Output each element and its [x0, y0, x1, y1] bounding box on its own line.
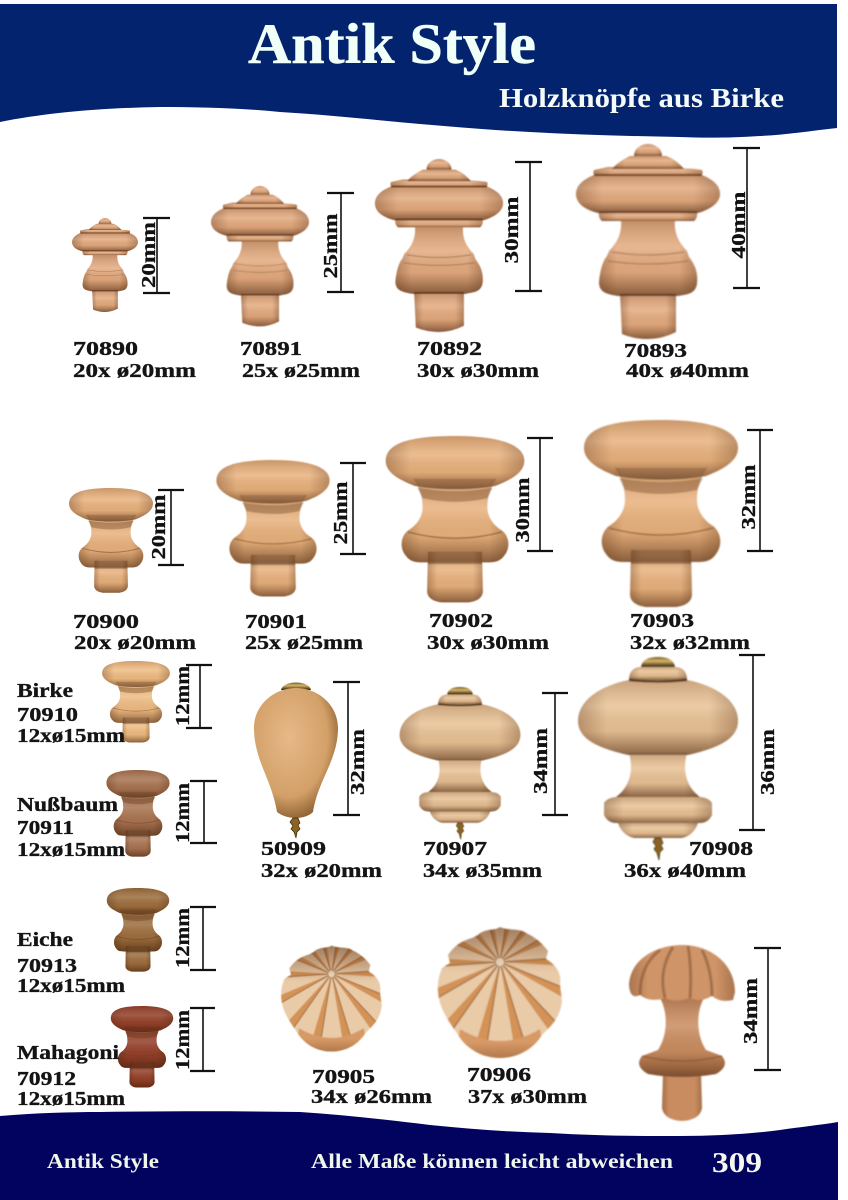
label 70891: 25x ø25mm [242, 360, 360, 382]
product 50909 [254, 682, 382, 882]
dimension 20mm: 20mm [138, 222, 160, 288]
dimension 32mm [333, 682, 369, 815]
label Birke [17, 680, 125, 747]
knob 70892 [375, 159, 503, 332]
label 70908: 36x ø40mm [624, 860, 746, 882]
label 70906: 37x ø30mm [468, 1086, 587, 1108]
dimension 36mm [739, 655, 779, 830]
dimension 40mm: 40mm [728, 191, 750, 258]
dimension 34mm [530, 693, 568, 815]
dimension 12mm [172, 907, 216, 970]
title: Antik Style [248, 13, 536, 76]
product 70905 [238, 882, 432, 1108]
fluted mushroom knob [629, 945, 735, 1121]
label Eiche [17, 929, 125, 997]
product 70903 [584, 420, 773, 654]
label 50909: 50909 [261, 838, 326, 860]
label 70891 [240, 338, 360, 382]
label 70892: 30x ø30mm [417, 360, 539, 382]
label Nussbaum: 70911 [17, 817, 74, 839]
dimension 20mm [148, 490, 184, 565]
dimension 32mm: 32mm [347, 729, 369, 795]
knob 70907 [400, 687, 520, 839]
dimension 30mm [501, 162, 542, 291]
label 70907 [423, 838, 542, 882]
label Mahagoni: Mahagoni [17, 1042, 120, 1064]
label 50909 [261, 838, 382, 882]
footer brand: Antik Style [47, 1149, 159, 1173]
dimension 12mm [172, 781, 217, 843]
dimension 30mm [512, 438, 553, 551]
label 70905 [311, 1066, 432, 1108]
dimension 20mm: 20mm [148, 494, 170, 560]
dimension 34mm [740, 948, 781, 1070]
label Mahagoni: 12xø15mm [17, 1088, 125, 1110]
product 70912 Mahagoni [17, 1006, 215, 1110]
footer note: Alle Maße können leicht abweichen [311, 1149, 673, 1173]
label Birke: Birke [17, 680, 73, 702]
fluted knob 70905 [238, 882, 425, 1066]
label 70906 [467, 1064, 587, 1108]
product mushroom knob [629, 945, 781, 1121]
dimension 32mm: 32mm [738, 464, 760, 530]
label 70902: 70902 [429, 610, 493, 632]
dimension 25mm [330, 463, 366, 554]
product 70891 [211, 186, 360, 382]
product 70911 Nussbaum [17, 770, 217, 861]
dimension 12mm [172, 665, 212, 728]
dimension 12mm: 12mm [172, 1010, 194, 1070]
dimension 30mm: 30mm [512, 477, 534, 542]
product 70913 Eiche [17, 888, 216, 997]
label 70890 [73, 338, 196, 382]
product 70907 [400, 687, 568, 882]
label Nussbaum [17, 794, 125, 861]
product 70892 [375, 159, 542, 382]
knob Nussbaum [106, 770, 170, 857]
knob 70902 [386, 436, 524, 602]
knob 70891 [211, 186, 309, 326]
dimension 25mm: 25mm [320, 213, 342, 278]
knob Birke [102, 661, 170, 743]
product 70900 [69, 488, 196, 654]
label Nussbaum: Nußbaum [17, 794, 118, 816]
product 70893 [576, 144, 760, 382]
label Eiche: 12xø15mm [17, 975, 125, 997]
product 70890 [72, 218, 196, 382]
label 70905: 70905 [312, 1066, 375, 1088]
dimension 40mm [728, 148, 760, 288]
dimension 12mm: 12mm [172, 908, 194, 968]
product 70901 [216, 460, 366, 654]
knob 70890 [72, 218, 138, 312]
product 70906 [385, 848, 615, 1108]
product 70908 [578, 655, 779, 882]
label Eiche: Eiche [17, 929, 73, 951]
dimension 25mm [320, 193, 354, 292]
dimension 20mm [138, 218, 170, 293]
label 70893: 70893 [624, 340, 687, 362]
dimension 34mm: 34mm [740, 978, 762, 1044]
knob Mahagoni [111, 1006, 173, 1088]
label 70893: 40x ø40mm [626, 360, 749, 382]
label Nussbaum: 12xø15mm [17, 839, 125, 861]
label 70890: 20x ø20mm [73, 360, 196, 382]
label 70901: 25x ø25mm [245, 632, 363, 654]
label 70900: 70900 [73, 611, 139, 633]
label Birke: 12xø15mm [17, 725, 125, 747]
label Mahagoni [17, 1042, 125, 1110]
label 70891: 70891 [240, 338, 302, 360]
subtitle: Holzknöpfe aus Birke [499, 83, 784, 113]
label 70905: 34x ø26mm [311, 1086, 432, 1108]
fluted knob 70906 [385, 848, 615, 1076]
header banner [0, 4, 837, 138]
dimension 30mm: 30mm [501, 196, 523, 264]
label Mahagoni: 70912 [17, 1068, 76, 1090]
label 70892 [417, 338, 539, 382]
product 70902 [386, 436, 553, 654]
knob 50909 pear [254, 682, 338, 838]
knob 70901 [216, 460, 330, 597]
label 70902 [427, 610, 549, 654]
label 70907: 34x ø35mm [423, 860, 542, 882]
knob 70893 [576, 144, 720, 339]
label Eiche: 70913 [17, 955, 77, 977]
knob 70908 [578, 657, 738, 860]
knob Eiche [107, 888, 169, 972]
product 70910 Birke [17, 661, 212, 747]
label 70893 [624, 340, 749, 382]
footer banner [0, 1111, 838, 1200]
dimension 34mm: 34mm [530, 728, 552, 794]
knob 70900 [69, 488, 153, 593]
label Birke: 70910 [17, 704, 78, 726]
dimension 32mm [738, 430, 773, 551]
dimension 12mm: 12mm [172, 666, 194, 726]
label 70900: 20x ø20mm [74, 632, 196, 654]
label 70908: 70908 [689, 838, 753, 860]
label 70903: 70903 [630, 610, 694, 632]
label 70890: 70890 [73, 338, 138, 360]
label 70903: 32x ø32mm [630, 632, 750, 654]
label 50909: 32x ø20mm [261, 860, 382, 882]
page number: 309 [712, 1148, 762, 1179]
dimension 25mm: 25mm [330, 481, 352, 544]
label 70900 [73, 611, 196, 654]
label 70903 [630, 610, 750, 654]
label 70901 [245, 611, 363, 654]
label 70908 [624, 838, 753, 882]
dimension 36mm: 36mm [757, 729, 779, 795]
dimension 12mm [172, 1008, 215, 1071]
label 70901: 70901 [245, 611, 307, 633]
label 70906: 70906 [467, 1064, 531, 1086]
dimension 12mm: 12mm [172, 783, 194, 843]
label 70892: 70892 [417, 338, 482, 360]
label 70907: 70907 [423, 838, 487, 860]
knob 70903 [584, 420, 738, 607]
label 70902: 30x ø30mm [427, 632, 549, 654]
